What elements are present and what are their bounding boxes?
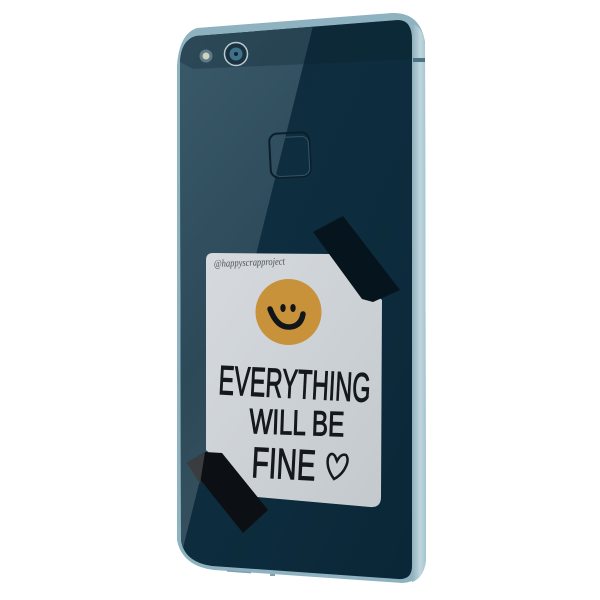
tape top right (313, 216, 400, 302)
camera lens (224, 42, 248, 66)
sticker card (206, 253, 382, 507)
camera band (180, 20, 412, 69)
side button (413, 58, 425, 62)
icon: heart (328, 454, 348, 479)
headline: will be: WILL BE (249, 402, 345, 444)
transparent case outline (177, 13, 426, 583)
tape bottom left (187, 452, 268, 533)
flash (200, 50, 212, 62)
phone back panel (180, 20, 412, 580)
smiley face icon (256, 279, 322, 345)
headline: everything: EVERYTHING (218, 357, 372, 411)
headline: fine: FINE (250, 439, 317, 490)
handle text: @happyscrapproject (214, 256, 286, 270)
fingerprint sensor (269, 132, 311, 178)
glossy highlight (180, 26, 313, 548)
case bottom ports (227, 570, 275, 576)
phone case product image (177, 13, 426, 583)
